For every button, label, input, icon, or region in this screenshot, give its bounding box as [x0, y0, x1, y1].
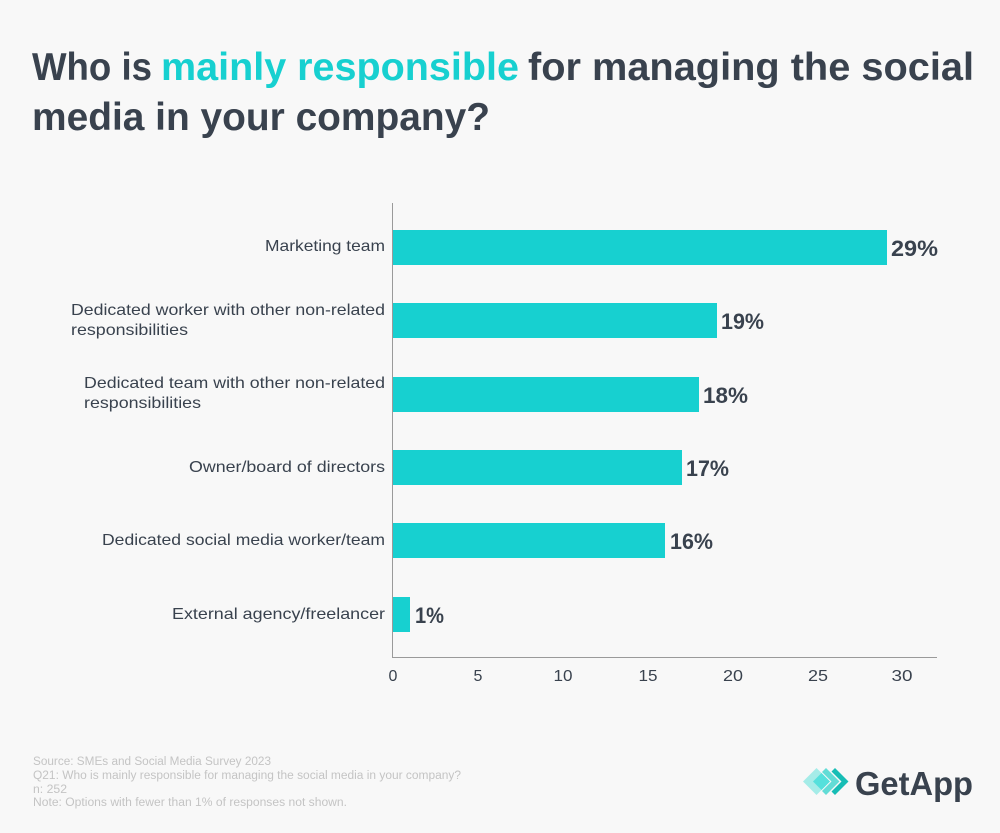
- category labels: responsibilities: [71, 322, 188, 339]
- logo: GetApp: [803, 765, 973, 802]
- title: media in your company?: [32, 96, 490, 139]
- value labels: 18%: [703, 383, 748, 408]
- category labels: [71, 238, 386, 623]
- value labels: 29%: [891, 236, 938, 261]
- title: Who is: [32, 46, 152, 89]
- value labels: [415, 236, 938, 628]
- category labels: External agency/freelancer: [172, 606, 386, 623]
- axis ticks: 10: [554, 668, 573, 685]
- axis ticks: 25: [808, 668, 828, 685]
- category labels: Marketing team: [265, 238, 385, 255]
- axis ticks: 5: [474, 668, 483, 685]
- title: [32, 46, 974, 139]
- bar chart: [71, 203, 938, 685]
- title: for managing the social: [528, 46, 974, 89]
- axes: [392, 203, 937, 658]
- category labels: responsibilities: [84, 395, 201, 412]
- category labels: Owner/board of directors: [189, 459, 385, 476]
- bars: [393, 230, 887, 632]
- source notes: Source: SMEs and Social Media Survey 2023: [33, 756, 271, 768]
- value labels: 16%: [670, 529, 713, 554]
- logo icon: [803, 768, 848, 795]
- axis ticks: [389, 668, 913, 685]
- source notes: [33, 756, 461, 809]
- source notes: Q21: Who is mainly responsible for managing the social media in your company?: [33, 770, 461, 782]
- category labels: Dedicated worker with other non-related: [71, 302, 385, 319]
- axis ticks: 20: [723, 668, 743, 685]
- logo wordmark: GetApp: [855, 765, 973, 802]
- source notes: Note: Options with fewer than 1% of responses not shown.: [33, 797, 347, 809]
- category labels: Dedicated social media worker/team: [102, 532, 385, 549]
- value labels: 17%: [686, 456, 729, 481]
- title: mainly responsible: [161, 46, 519, 89]
- category labels: Dedicated team with other non-related: [84, 375, 385, 392]
- source notes: n: 252: [33, 784, 67, 796]
- axis ticks: 30: [892, 668, 913, 685]
- value labels: 1%: [415, 603, 444, 628]
- value labels: 19%: [721, 309, 764, 334]
- axis ticks: 0: [389, 668, 398, 685]
- axis ticks: 15: [638, 668, 658, 685]
